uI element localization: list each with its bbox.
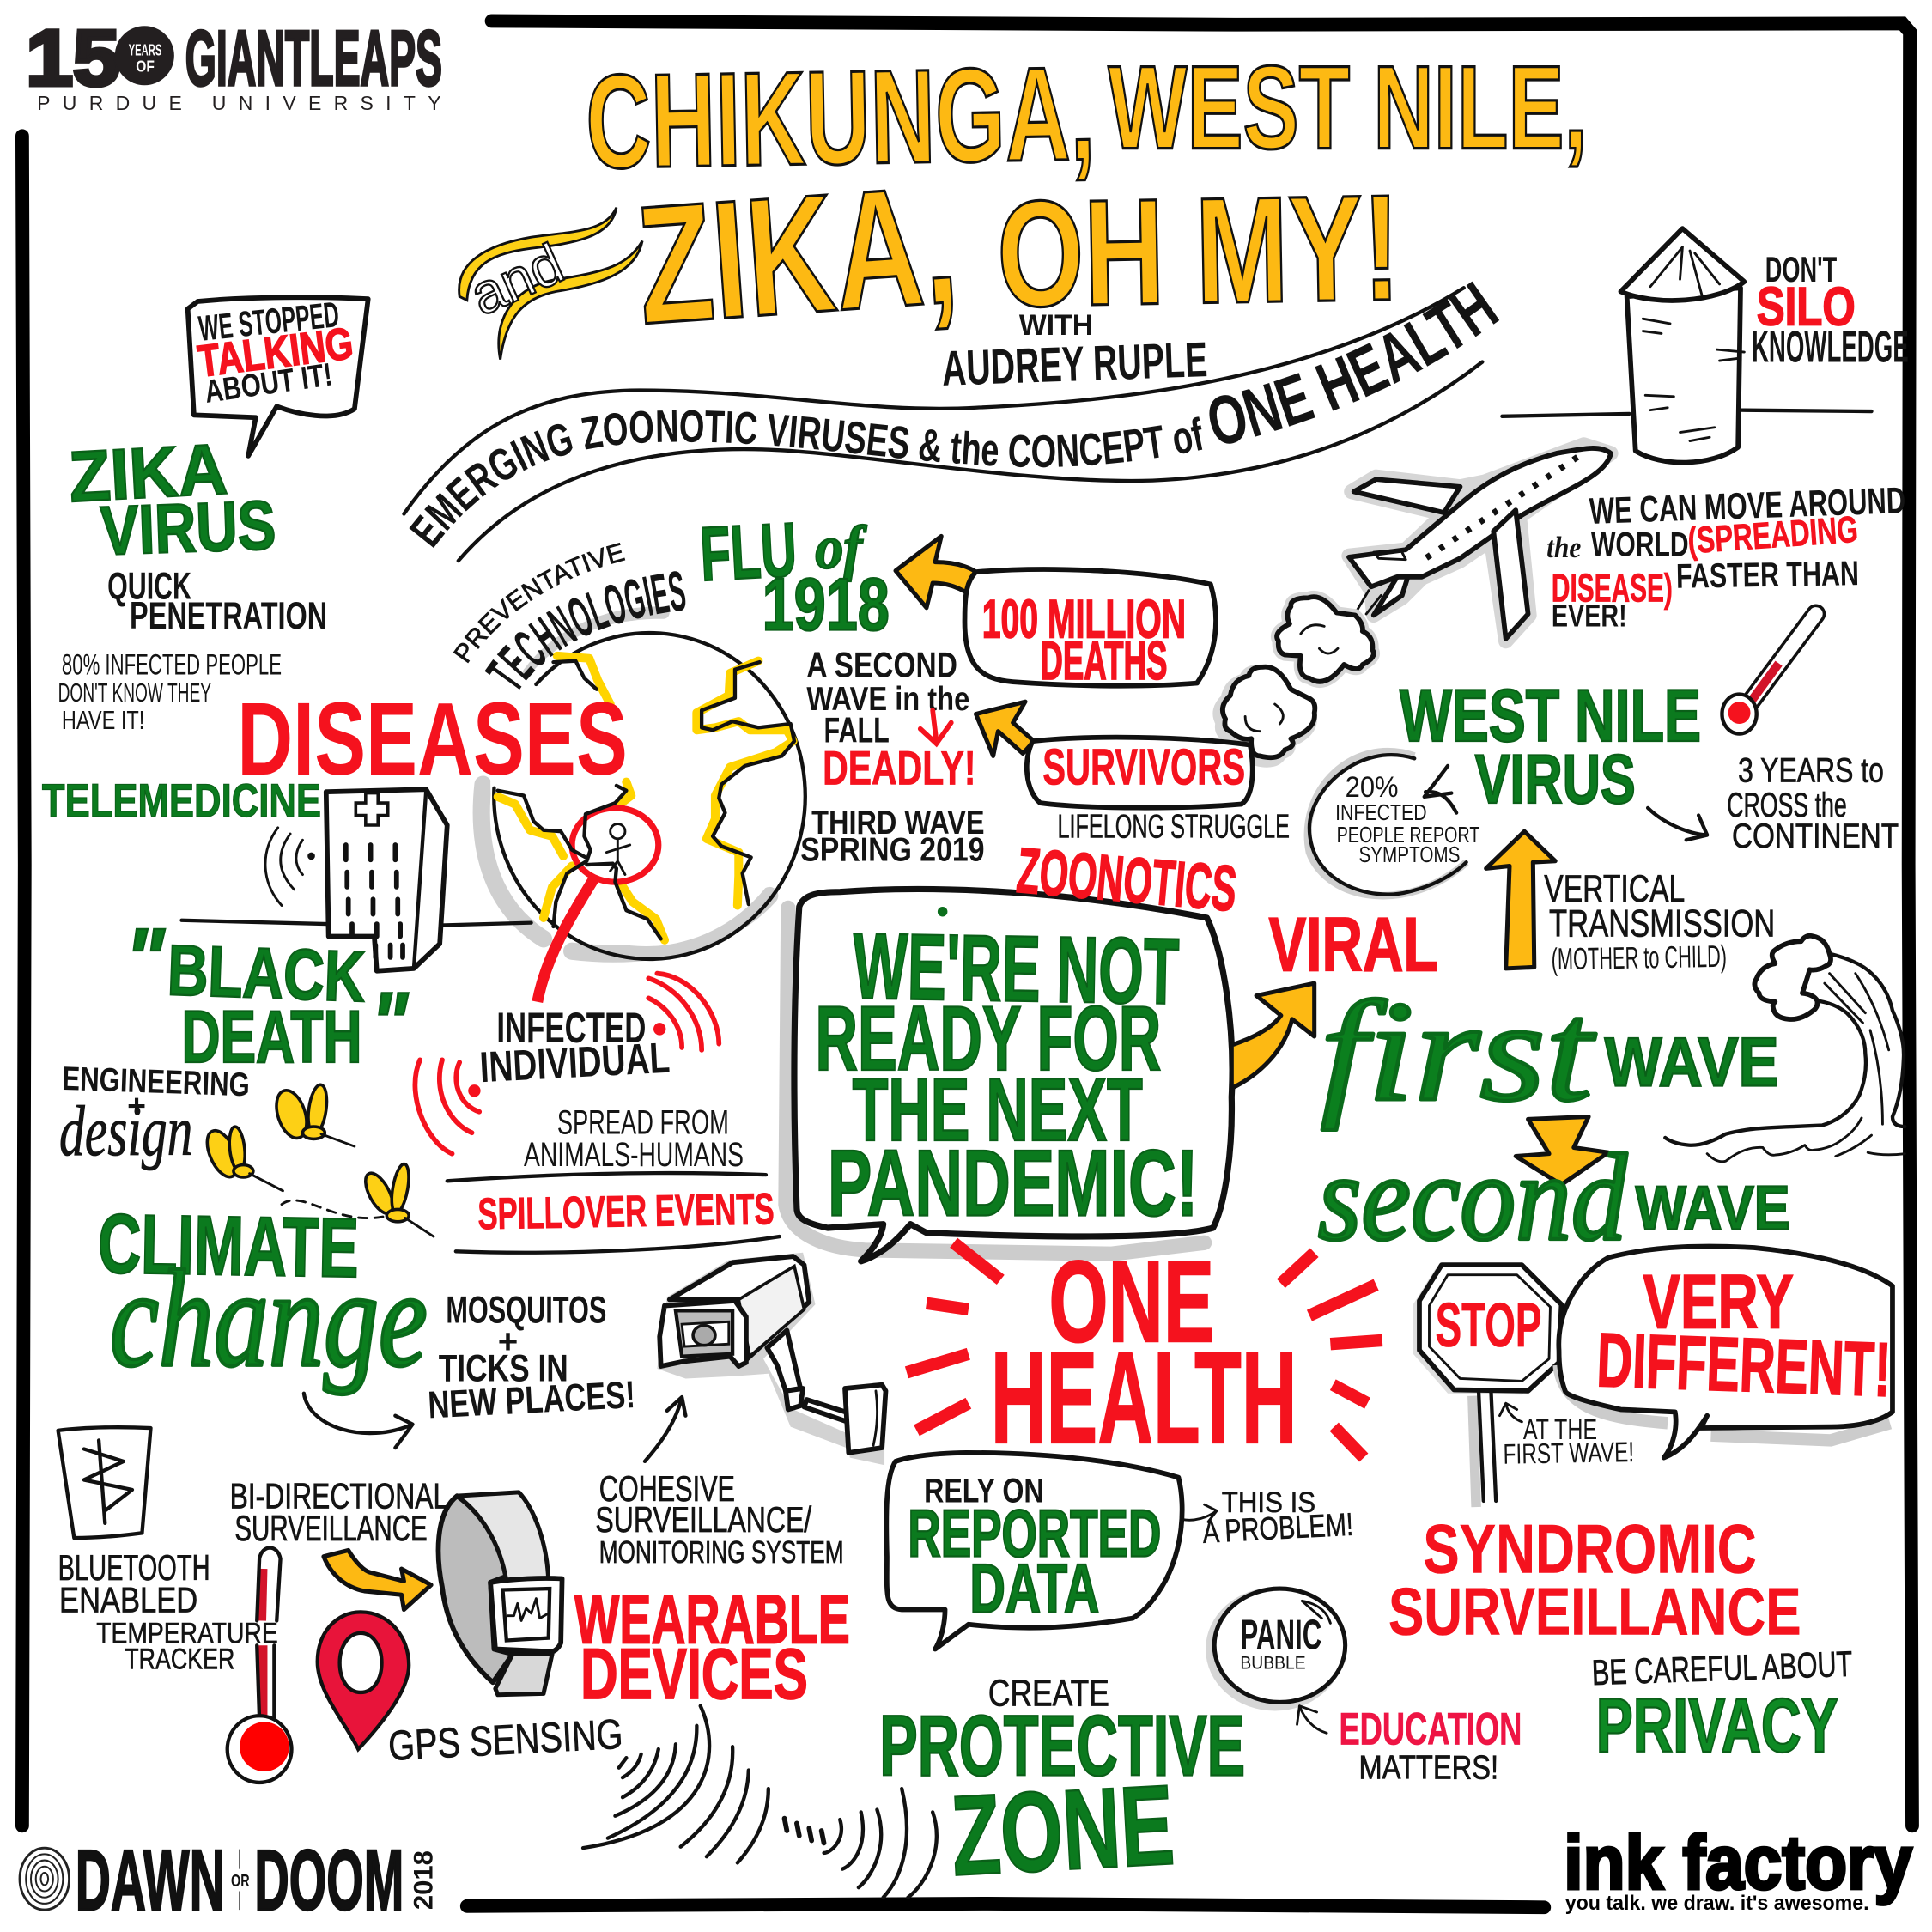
vertical transmission text: TRANSMISSION (1549, 902, 1775, 945)
callout: moving around the world (1546, 480, 1906, 633)
box: 100 million deaths: 100 MILLION (982, 589, 1186, 649)
smoke clouds (1219, 597, 1374, 762)
flu of 1918: 1918 (762, 564, 890, 647)
heading: one health with rays: ONE (1048, 1236, 1214, 1366)
second wave text: WAVE (1636, 1174, 1790, 1242)
logo: 150 years of giant leaps: 15 (26, 14, 120, 102)
second wave notes: DEADLY! (823, 741, 976, 795)
GPS sensing label: GPS SENSING (387, 1711, 624, 1770)
engineering plus design (59, 1060, 251, 1171)
speech bubble: we stopped talking (188, 294, 368, 456)
logo: 150 years of giant leaps: OF (136, 57, 155, 75)
title (585, 38, 1588, 360)
icon: thermometer (1722, 614, 1816, 734)
speech bubble: rely on reported data: DATA (969, 1550, 1099, 1627)
main speech bubble: we're not ready: WE'RE NOT (852, 914, 1180, 1024)
callout: moving around the world: WORLD (1591, 525, 1689, 563)
speech bubble: we stopped talking: ABOUT IT! (203, 355, 335, 410)
mosquitos and ticks note (304, 1290, 636, 1448)
mosquitos and ticks note: NEW PLACES! (427, 1374, 636, 1427)
technologies label (453, 543, 685, 690)
heading: climate change: change (110, 1242, 428, 1395)
bi-directional surveillance text: SURVEILLANCE (234, 1508, 428, 1548)
arrow: vertical transmission (1486, 831, 1555, 969)
callout: moving around the world: FASTER THAN (1676, 554, 1859, 596)
cohesive surveillance text: COHESIVE (599, 1468, 735, 1509)
infected individual: INDIVIDUAL (478, 1033, 671, 1091)
three years note (1648, 751, 1899, 855)
second wave notes: FALL (824, 710, 890, 750)
callout: 20 percent report symptoms: 20% (1346, 771, 1399, 804)
second wave notes: A SECOND (806, 644, 957, 684)
education matters: EDUCATION (1339, 1704, 1522, 1754)
cohesive surveillance text: SURVEILLANCE/ (595, 1499, 811, 1540)
presenter: AUDREY RUPLE (941, 332, 1208, 397)
box: survivors: LIFELONG STRUGGLE (1057, 808, 1290, 845)
spillover events: SPILLOVER EVENTS (477, 1183, 775, 1238)
main speech bubble: we're not ready: THE NEXT (853, 1060, 1143, 1159)
spillover events: ANIMALS-HUMANS (524, 1135, 744, 1174)
first wave text (1321, 972, 1779, 1131)
hospital (181, 789, 532, 971)
zika virus section: VIRUS (99, 487, 277, 570)
first wave text: first (1321, 972, 1596, 1131)
arrow: bubble to viral (1231, 983, 1315, 1088)
three years note: CONTINENT (1732, 817, 1899, 855)
privacy: PRIVACY (1596, 1682, 1838, 1768)
west nile virus heading: WEST NILE (1400, 675, 1701, 757)
speech bubble: we stopped talking: WE STOPPED (197, 294, 341, 349)
heading: black death: " (125, 911, 166, 1007)
speech bubble: rely on reported data: REPORTED (908, 1498, 1161, 1571)
flu of 1918 (698, 506, 890, 647)
engineering plus design: + (127, 1088, 146, 1124)
engineering plus design: ENGINEERING (62, 1060, 251, 1103)
bluetooth text: TRACKER (125, 1643, 234, 1676)
note: this is a problem (1182, 1486, 1354, 1550)
heading: diseases: DISEASES (237, 681, 628, 797)
logo: dawn or doom 2018: DAWN (76, 1832, 225, 1929)
create protective zone: CREATE (988, 1674, 1109, 1715)
stop sign: STOP (1436, 1291, 1541, 1360)
callout: 20 percent report symptoms: SYMPTOMS (1358, 843, 1460, 867)
panic bubble (1206, 1588, 1346, 1710)
heading: one health with rays (907, 1236, 1382, 1471)
arrow: first to second wave (1516, 1117, 1608, 1185)
vertical transmission text: (MOTHER to CHILD) (1551, 939, 1727, 976)
wearable devices heading (574, 1581, 850, 1714)
cohesive surveillance text: MONITORING SYSTEM (599, 1534, 844, 1570)
logo: 150 years of giant leaps: GIANTLEAPS (185, 15, 442, 102)
zika virus section: 80% INFECTED PEOPLE (62, 648, 282, 681)
box: survivors: SURVIVORS (1042, 740, 1245, 796)
icon: wearable wristband (438, 1492, 562, 1695)
title: CHIKUNGA, (585, 38, 1097, 197)
logo: 150 years of giant leaps (26, 14, 442, 114)
note: at the first wave: FIRST WAVE! (1503, 1437, 1634, 1471)
icon: mosquitoes (201, 1084, 434, 1236)
speech bubble: rely on reported data (886, 1453, 1182, 1649)
spillover events: SPREAD FROM (557, 1103, 729, 1142)
west nile virus heading (1400, 675, 1701, 818)
vertical transmission text: VERTICAL (1544, 868, 1685, 910)
bluetooth text (58, 1547, 278, 1676)
infected individual: INFECTED (496, 1003, 646, 1052)
callout: moving around the world: the (1546, 532, 1581, 564)
speech bubble: very different (1558, 1247, 1893, 1458)
note: this is a problem: A PROBLEM! (1201, 1506, 1354, 1550)
bluetooth text: BLUETOOTH (58, 1547, 210, 1588)
create protective zone: PROTECTIVE (879, 1698, 1245, 1794)
title connector: and: and (461, 232, 573, 328)
zoonotics label: ZOONOTICS (1014, 834, 1240, 925)
box: survivors (1027, 738, 1290, 845)
technologies label: TECHNOLOGIES (484, 571, 685, 690)
logo: 150 years of giant leaps: YEARS (129, 41, 161, 59)
heading: black death: BLACK (167, 929, 367, 1017)
main speech bubble: we're not ready: READY FOR (815, 987, 1161, 1090)
silo (1502, 228, 1872, 463)
title: OH MY! (996, 164, 1401, 339)
logo: 150 years of giant leaps: PURDUE UNIVERSITY (37, 92, 441, 114)
airplane (1349, 445, 1611, 641)
title connector: and (459, 208, 642, 360)
presenter: WITH (1019, 309, 1093, 342)
icon: GPS pin (318, 1612, 409, 1749)
don't silo knowledge (1752, 249, 1909, 372)
icon: bluetooth (58, 1427, 151, 1538)
speech bubble: we stopped talking: TALKING (195, 318, 355, 386)
second wave notes: THIRD WAVE (811, 805, 985, 841)
mosquitos and ticks note: TICKS IN (439, 1347, 568, 1389)
second wave notes (800, 644, 985, 869)
panic bubble: PANIC (1240, 1613, 1321, 1659)
create protective zone: ZONE (948, 1761, 1177, 1900)
education matters: MATTERS! (1358, 1750, 1498, 1787)
west nile virus heading: VIRUS (1475, 741, 1636, 818)
heading: one health with rays: HEALTH (991, 1325, 1297, 1471)
syndromic surveillance heading: SURVEILLANCE (1388, 1575, 1801, 1649)
heading: black death: " (371, 975, 409, 1072)
logo: dawn or doom 2018: DOOM (254, 1832, 404, 1929)
globe with pandemic spread (482, 613, 805, 1002)
zika virus section: QUICK (107, 566, 191, 608)
heading: climate change (97, 1196, 428, 1395)
title: WEST NILE, (1108, 42, 1588, 174)
icon: body thermometer (228, 1548, 292, 1783)
main speech bubble: we're not ready (786, 890, 1232, 1261)
logo: dawn or doom 2018 (20, 1832, 439, 1929)
note: at the first wave: AT THE (1523, 1414, 1597, 1446)
heading: telemedicine: TELEMEDICINE (42, 775, 321, 827)
zika virus section: ZIKA (67, 428, 229, 517)
box: 100 million deaths (964, 569, 1216, 691)
logo: ink factory: you talk. we draw. it's awesome. (1565, 1892, 1869, 1915)
second wave notes: WAVE in the (806, 681, 969, 718)
logo: dawn or doom 2018: 2018 (408, 1850, 439, 1910)
second wave text: second (1318, 1130, 1628, 1267)
second wave notes: SPRING 2019 (800, 832, 985, 869)
don't silo knowledge: DON'T (1765, 249, 1838, 289)
education matters (1297, 1704, 1522, 1787)
spillover events (447, 1103, 780, 1253)
three years note: CROSS the (1727, 786, 1847, 824)
bi-directional surveillance text: BI-DIRECTIONAL (230, 1476, 448, 1516)
callout: 20 percent report symptoms: PEOPLE REPORT (1337, 823, 1480, 848)
syndromic surveillance heading: SYNDROMIC (1423, 1510, 1757, 1588)
flu of 1918: FLU (698, 506, 799, 597)
arrow: to wearable (324, 1550, 431, 1610)
flu of 1918: of (815, 513, 867, 582)
arrow to flu of 1918 (896, 536, 982, 608)
privacy (1591, 1643, 1853, 1768)
zika virus section (58, 428, 327, 735)
wearable devices heading: DEVICES (580, 1633, 808, 1714)
note: at the first wave (1499, 1403, 1634, 1471)
sound waves (583, 1706, 937, 1898)
heading: black death (125, 911, 409, 1078)
speech bubble: very different: VERY (1643, 1259, 1794, 1345)
box: 100 million deaths: DEATHS (1040, 631, 1167, 691)
bluetooth text: ENABLED (59, 1579, 197, 1619)
heading: black death: DEATH (181, 996, 362, 1078)
zika virus section: HAVE IT! (62, 707, 144, 735)
main speech bubble: we're not ready: PANDEMIC! (828, 1132, 1198, 1236)
arrow: survivors to deadly (976, 702, 1034, 756)
bi-directional surveillance text (230, 1476, 448, 1548)
zika virus section: DON'T KNOW THEY (58, 679, 211, 708)
syndromic surveillance heading (1388, 1510, 1801, 1649)
cohesive surveillance text (595, 1468, 844, 1570)
callout: moving around the world: EVER! (1552, 597, 1627, 633)
mosquitos and ticks note: + (498, 1321, 518, 1360)
create protective zone (879, 1674, 1245, 1900)
first wave text: WAVE (1605, 1024, 1779, 1102)
viral label: VIRAL (1268, 902, 1438, 987)
heading: climate change: CLIMATE (97, 1196, 360, 1295)
zika virus section: PENETRATION (130, 595, 327, 637)
note: this is a problem: THIS IS (1222, 1486, 1315, 1519)
bluetooth text: TEMPERATURE (96, 1617, 278, 1649)
panic bubble: BUBBLE (1240, 1652, 1306, 1674)
don't silo knowledge: SILO (1757, 276, 1856, 337)
vertical transmission text (1544, 868, 1775, 976)
wearable devices heading: WEARABLE (574, 1581, 850, 1658)
infected individual (415, 974, 719, 1154)
presenter (941, 309, 1208, 397)
three years note: 3 YEARS to (1738, 751, 1884, 790)
callout: moving around the world: (SPREADING (1686, 509, 1859, 562)
banner: subtitle ribbon: EMERGING ZOONOTIC VIRUSES & the CONCEPT of ONE HEALTH (409, 282, 1499, 548)
title: ZIKA, (632, 150, 963, 360)
mosquitos and ticks note: MOSQUITOS (446, 1290, 606, 1332)
icon: ocean wave (1665, 936, 1905, 1162)
logo: dawn or doom 2018: OR (231, 1872, 250, 1891)
callout: moving around the world: DISEASE) (1552, 566, 1673, 611)
speech bubble: rely on reported data: RELY ON (924, 1471, 1044, 1510)
stop sign (1413, 1265, 1561, 1507)
callout: 20 percent report symptoms: INFECTED (1335, 801, 1427, 825)
icon: surveillance camera (645, 1253, 885, 1465)
callout: 20 percent report symptoms (1308, 751, 1480, 896)
technologies label: PREVENTATIVE (453, 543, 625, 663)
engineering plus design: design (59, 1092, 192, 1171)
